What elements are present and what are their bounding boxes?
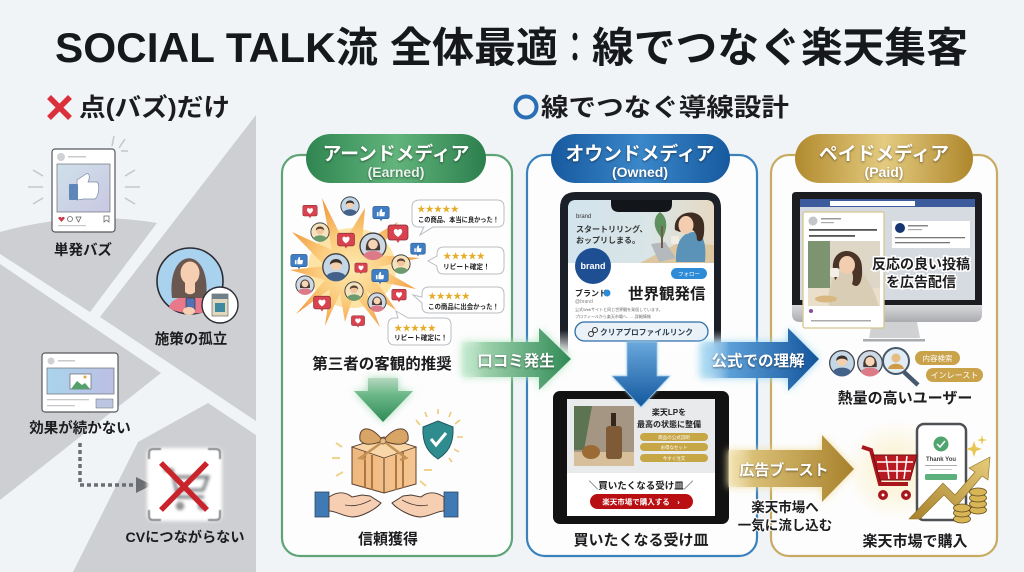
paid pill: ペイドメディア (819, 142, 949, 164)
product photo (574, 406, 634, 466)
heading: connected design: 線でつなぐ導線設計 (541, 94, 789, 122)
phone mockup: brand (576, 214, 591, 220)
buzz burst (290, 197, 425, 328)
caption: flow into Rakuten: 一気に流し込む (738, 517, 832, 533)
phone mockup: フォロー (678, 271, 700, 278)
owned pill: オウンドメディア (566, 142, 714, 164)
phone mockup (555, 192, 727, 361)
panel: paid media: 熱量の高いユーザー (838, 389, 972, 407)
coins (954, 488, 986, 523)
phone mockup: プロフィールから楽天市場へ……詳細情報 (575, 313, 651, 319)
person (169, 296, 212, 313)
sparkles (966, 441, 982, 457)
left item: effect does not last: 効果が続かない (29, 419, 131, 437)
review bubble 1: ★★★★★ (417, 204, 459, 214)
arrow: word of mouth: 口コミ発生 (477, 352, 555, 370)
review bubble 3: この商品に出会かった！ (428, 302, 499, 311)
red cross (161, 463, 207, 510)
left item: no conversion (125, 448, 245, 546)
growth arrow (909, 457, 990, 519)
owned pill: (Owned) (612, 164, 668, 180)
arrow: green down (354, 378, 413, 422)
follow button (671, 268, 707, 279)
arrow: ad boost: 広告ブースト (739, 461, 829, 479)
review bubble 1: この商品、本当に良かった！ (418, 215, 499, 224)
title: 全体最適 (390, 24, 558, 71)
title (55, 24, 968, 71)
caption: flow into Rakuten (738, 499, 832, 533)
review bubble 4: リピート確定に！ (394, 333, 448, 342)
blurred cart (164, 470, 208, 508)
tablet LP: 商品の公式説明 (658, 434, 690, 441)
title: SOCIAL TALK流 (55, 24, 378, 71)
paid pill: (Paid) (865, 164, 903, 180)
arrow: blue down (612, 342, 670, 407)
side ad card (892, 221, 970, 248)
clear profile link (575, 322, 708, 341)
shield (416, 409, 463, 462)
notch (611, 200, 672, 212)
paid pill (795, 134, 973, 183)
dotted arrow to CV (80, 443, 152, 493)
heading: dots only: 点(バズ)だけ (79, 93, 230, 122)
earned pill: (Earned) (368, 164, 424, 180)
left item: effect does not last (29, 353, 131, 437)
gift and hands (315, 409, 463, 517)
phone mockup: 世界観発信 (628, 285, 706, 303)
hero banner (568, 200, 714, 263)
post photo (808, 241, 880, 306)
phone mockup: @brand (575, 299, 593, 305)
title: ： (562, 24, 588, 71)
left item: no conversion: CVにつながらない (125, 529, 245, 546)
panel: paid media (771, 134, 997, 556)
small product badge (202, 287, 238, 323)
monitor mockup: 反応の良い投稿 (872, 256, 970, 272)
brand logo (575, 248, 611, 284)
icon: blue circle (516, 96, 536, 118)
tablet LP: 楽天市場で購入する › (602, 496, 680, 506)
phone (917, 424, 966, 520)
rays (28, 136, 140, 204)
phone mockup: スタートリリング、 (576, 224, 647, 234)
passionate users (830, 348, 983, 385)
caption: flow into Rakuten: 楽天市場へ (751, 499, 819, 515)
panel: paid media: 楽天市場で購入 (862, 532, 968, 550)
phone mockup: おップリしまる。 (576, 236, 640, 245)
phone mockup: brand (580, 261, 606, 271)
panel: earned media: 第三者の客観的推奨 (312, 354, 452, 373)
review bubble 1 (412, 200, 504, 235)
tablet LP: 今すぐ注文 (663, 455, 686, 462)
review bubble 2: ★★★★★ (443, 251, 485, 261)
review bubble 2 (428, 247, 504, 274)
passionate users: インレースト (931, 371, 978, 380)
phone: Thank You (926, 457, 956, 463)
passionate users: 内容検索 (922, 353, 953, 363)
tablet LP (553, 391, 729, 524)
arrow: official understanding: 公式での理解 (711, 352, 805, 370)
post card (52, 149, 115, 232)
arrow: ad boost (728, 435, 854, 502)
left item: single buzz (28, 136, 140, 259)
review bubble 3 (413, 287, 504, 313)
left item: isolated measures: 施策の孤立 (155, 330, 227, 348)
image icon (70, 374, 91, 389)
review bubble 4: ★★★★★ (394, 323, 436, 333)
hands (315, 492, 458, 517)
tablet LP: 最高の状態に整備 (637, 419, 701, 429)
left grey shards backdrop (0, 115, 256, 572)
monitor mockup (792, 192, 982, 342)
panel: owned media: 買いたくなる受け皿 (573, 531, 709, 549)
tablet LP: ＼買いたくなる受け皿／ (589, 480, 694, 492)
thumb up (77, 174, 99, 200)
main post card (803, 212, 884, 328)
tablet LP: 楽天LPを (652, 407, 686, 417)
monitor mockup: を広告配信 (886, 274, 956, 290)
tablet LP: お得なセット (660, 444, 688, 450)
panel: earned media: 信頼獲得 (358, 530, 418, 548)
left item: single buzz: 単発バズ (54, 241, 112, 259)
phone mockup: 公式Webサイトと同じ世界観を発信しています。 (575, 306, 663, 312)
phone mockup: クリアプロファイルリンク (600, 327, 693, 337)
review bubble 3: ★★★★★ (428, 291, 470, 301)
title: 線でつなぐ楽天集客 (592, 24, 968, 71)
purchase illustration (845, 420, 990, 523)
review bubble 4 (388, 311, 451, 345)
phone mockup: ブランド (575, 288, 607, 298)
arrow: word of mouth (462, 328, 571, 390)
arrow: official understanding (700, 328, 819, 391)
icon: red cross (49, 97, 70, 118)
panel: owned media (527, 134, 757, 556)
earned pill: アーンドメディア (323, 142, 469, 164)
left item: isolated measures (155, 248, 238, 348)
panel: earned media (282, 134, 512, 556)
earned pill (306, 134, 486, 183)
review bubble 2: リピート確定！ (443, 262, 490, 271)
owned pill (551, 134, 730, 183)
cart (862, 447, 917, 500)
